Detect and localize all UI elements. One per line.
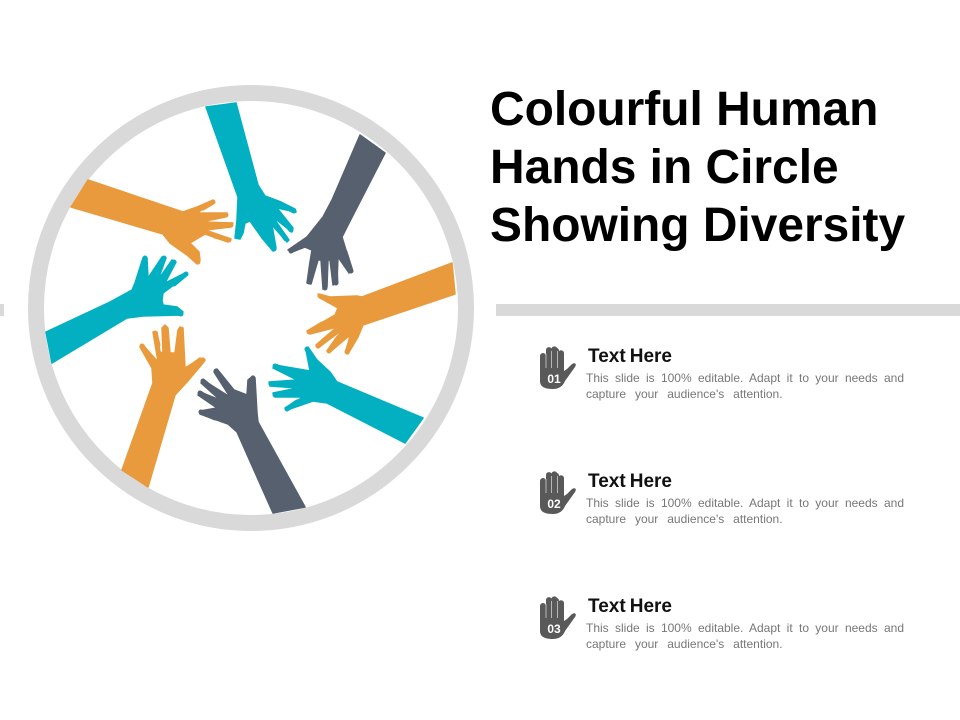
icon: hand 03: 03 [547, 622, 561, 636]
icon: hand 01: 01 [547, 372, 561, 386]
grey ring [36, 93, 466, 523]
right divider bar [496, 304, 960, 316]
icon: hand 02 [540, 471, 576, 514]
hand: orange right [307, 263, 455, 354]
hand: orange upper left [71, 180, 233, 264]
circle of hands [28, 85, 474, 531]
hand: grey bottom [198, 369, 305, 513]
icon: hand 02: 02 [547, 497, 561, 511]
text 02: This slide is 100% editable. Adapt it to your needs and capture your audience's attention. [586, 496, 904, 526]
heading 03: Text Here [588, 596, 672, 616]
hand: orange bottom left [122, 325, 205, 487]
item 03 [540, 596, 904, 650]
icon: hand 03 [540, 596, 576, 639]
title: Colourful Human [490, 83, 878, 136]
hand: teal top [206, 103, 296, 251]
title: Showing Diversity [490, 199, 905, 252]
title: Hands in Circle [490, 141, 839, 194]
hand: teal left [46, 257, 187, 363]
left divider bar [0, 304, 4, 316]
hand: teal lower right [269, 347, 423, 443]
heading 01: Text Here [588, 346, 672, 366]
item 01 [540, 346, 904, 400]
text 01: This slide is 100% editable. Adapt it to your needs and capture your audience's attention. [586, 371, 904, 400]
hand: grey top right [288, 135, 385, 289]
heading 02: Text Here [588, 470, 672, 492]
text 03: This slide is 100% editable. Adapt it to your needs and capture your audience's attention. [586, 621, 904, 650]
title [490, 83, 905, 252]
item 02 [540, 470, 904, 526]
icon: hand 01 [540, 346, 576, 389]
